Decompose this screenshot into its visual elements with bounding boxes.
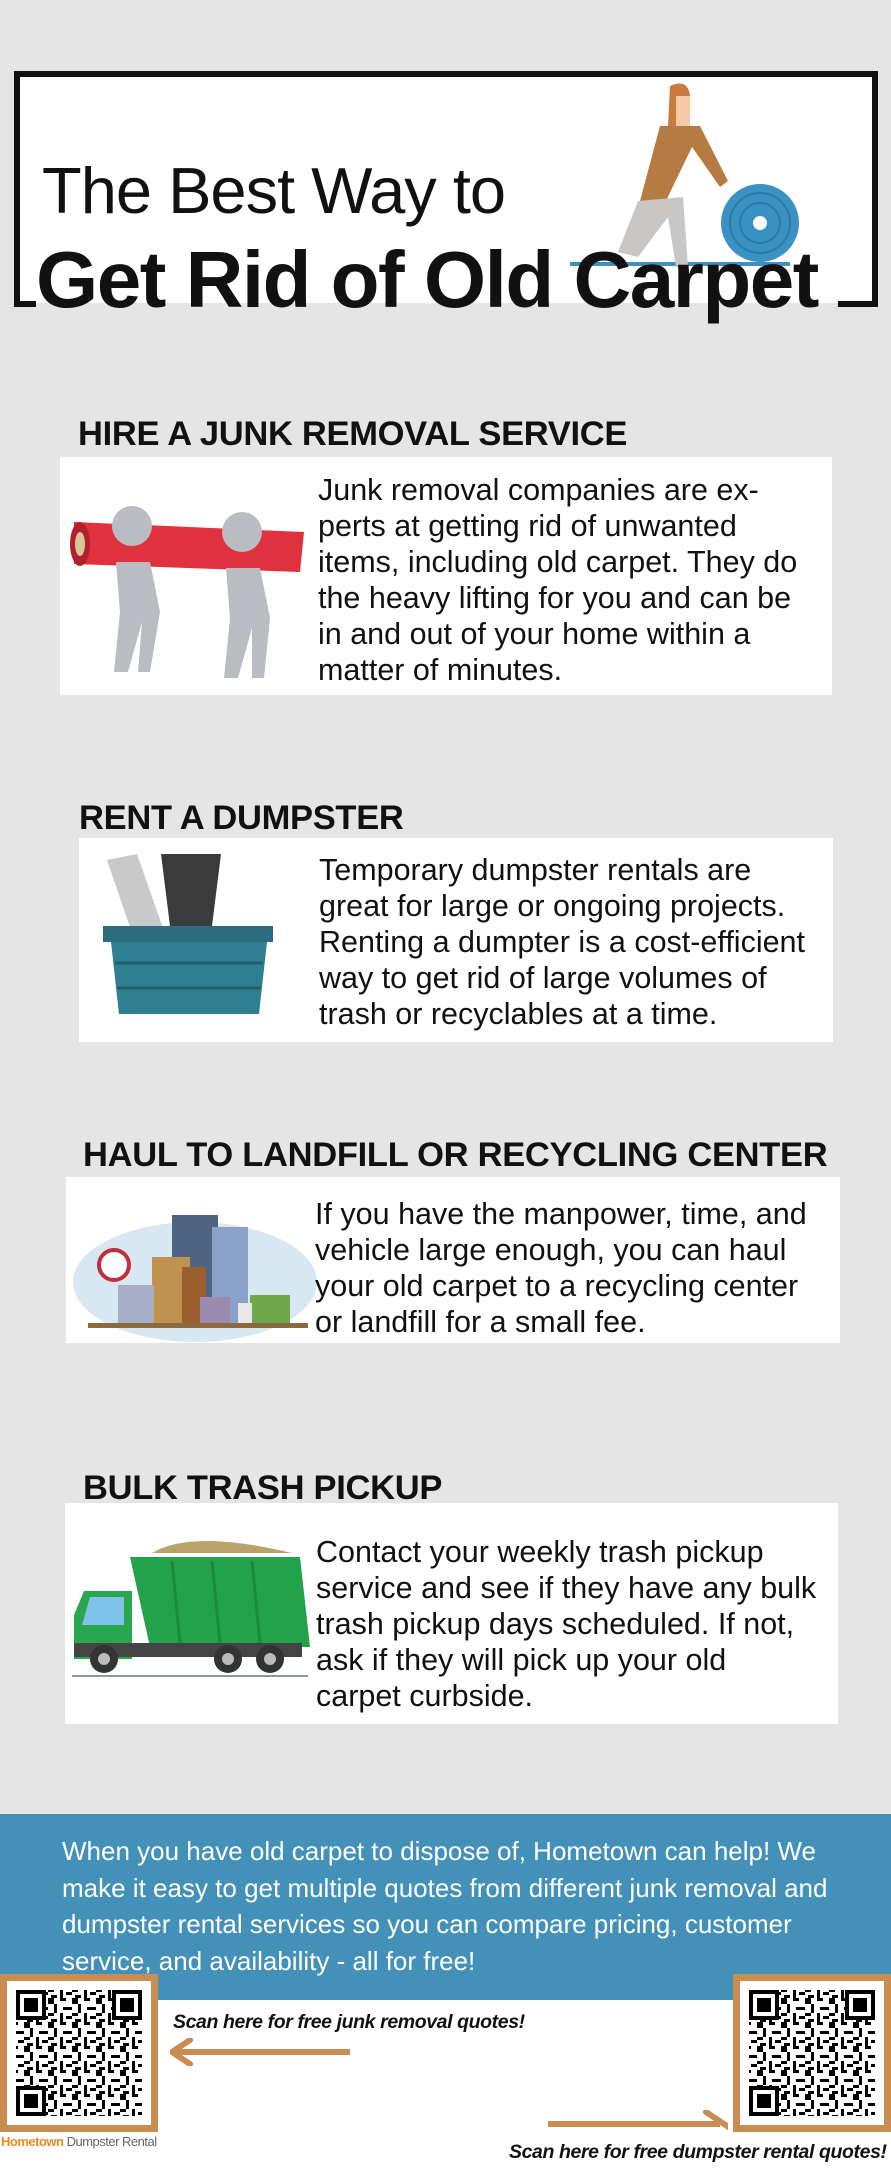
- icon: city with recycling truck: [73, 1215, 317, 1342]
- heading: rent a dumpster: RENT A DUMPSTER: [79, 799, 404, 837]
- QR code left: [0, 1974, 158, 2132]
- text: dumpster description: Renting a dumpter is a cost-efficient: [319, 925, 805, 959]
- arrow left: [170, 2038, 350, 2066]
- text: landfill description: or landfill for a small fee.: [315, 1305, 646, 1339]
- text: junk removal description: matter of minutes.: [318, 653, 562, 687]
- text: landfill description: vehicle large enough, you can haul: [315, 1233, 786, 1267]
- text: junk removal description: in and out of your home within a: [318, 617, 750, 651]
- text: bulk pickup description: Contact your weekly trash pickup: [316, 1535, 764, 1569]
- text: bulk pickup description: ask if they will pick up your old: [316, 1643, 726, 1677]
- title line 1: The Best Way to: [42, 154, 505, 227]
- icon: dumpster with carpet: [103, 854, 273, 1014]
- text: landfill description: If you have the manpower, time, and: [315, 1197, 807, 1231]
- panel: blue callout: [0, 1814, 891, 2000]
- text: landfill description: [315, 1197, 807, 1339]
- QR code right: [733, 1974, 891, 2132]
- panel: bulk pickup: [65, 1503, 838, 1724]
- text: junk removal description: items, including old carpet. They do: [318, 545, 797, 579]
- text: scan junk: Scan here for free junk removal quotes!: [173, 2011, 525, 2033]
- heading: bulk trash pickup: BULK TRASH PICKUP: [83, 1469, 442, 1507]
- text: bulk pickup description: [316, 1535, 816, 1713]
- panel: landfill: [66, 1177, 840, 1343]
- panel: dumpster: [79, 838, 833, 1042]
- text: callout: When you have old carpet to dispose of, Hometown can help! We: [62, 1836, 816, 1866]
- text: dumpster description: way to get rid of large volumes of: [319, 961, 767, 995]
- text: junk removal description: the heavy lifting for you and can be: [318, 581, 791, 615]
- text: dumpster description: [319, 853, 805, 1031]
- icon: two figures carrying red carpet: [70, 506, 304, 678]
- text: landfill description: your old carpet to a recycling center: [315, 1269, 798, 1303]
- heading: haul to landfill: HAUL TO LANDFILL OR RECYCLING CENTER: [83, 1136, 827, 1174]
- text: junk removal description: perts at getting rid of unwanted: [318, 509, 737, 543]
- text: callout: make it easy to get multiple quotes from different junk removal and: [62, 1872, 827, 1902]
- panel: junk removal: [60, 457, 832, 695]
- text: callout: [62, 1836, 827, 1976]
- text: dumpster description: Temporary dumpster rentals are: [319, 853, 751, 887]
- title line 2: Get Rid of Old Carpet: [36, 235, 818, 324]
- arrow right: [548, 2110, 728, 2130]
- title box: [14, 71, 878, 307]
- logo: Hometown Dumpster Rental: [1, 2134, 157, 2149]
- text: callout: dumpster rental services so you can compare pricing, customer: [62, 1909, 792, 1939]
- text: junk removal description: [318, 473, 797, 687]
- icon: green dump truck: [72, 1541, 310, 1677]
- icon: man rolling carpet: [570, 84, 799, 267]
- text: bulk pickup description: trash pickup days scheduled. If not,: [316, 1607, 794, 1641]
- text: callout: service, and availability - all for free!: [62, 1946, 475, 1976]
- text: bulk pickup description: service and see if they have any bulk: [316, 1571, 816, 1605]
- text: junk removal description: Junk removal companies are ex-: [318, 473, 759, 507]
- text: dumpster description: trash or recyclables at a time.: [319, 997, 717, 1031]
- text: scan dumpster: Scan here for free dumpster rental quotes!: [509, 2141, 887, 2163]
- heading: hire a junk removal service: HIRE A JUNK REMOVAL SERVICE: [78, 415, 627, 453]
- white footer: [0, 2000, 891, 2174]
- text: dumpster description: great for large or ongoing projects.: [319, 889, 785, 923]
- text: bulk pickup description: carpet curbside.: [316, 1679, 533, 1713]
